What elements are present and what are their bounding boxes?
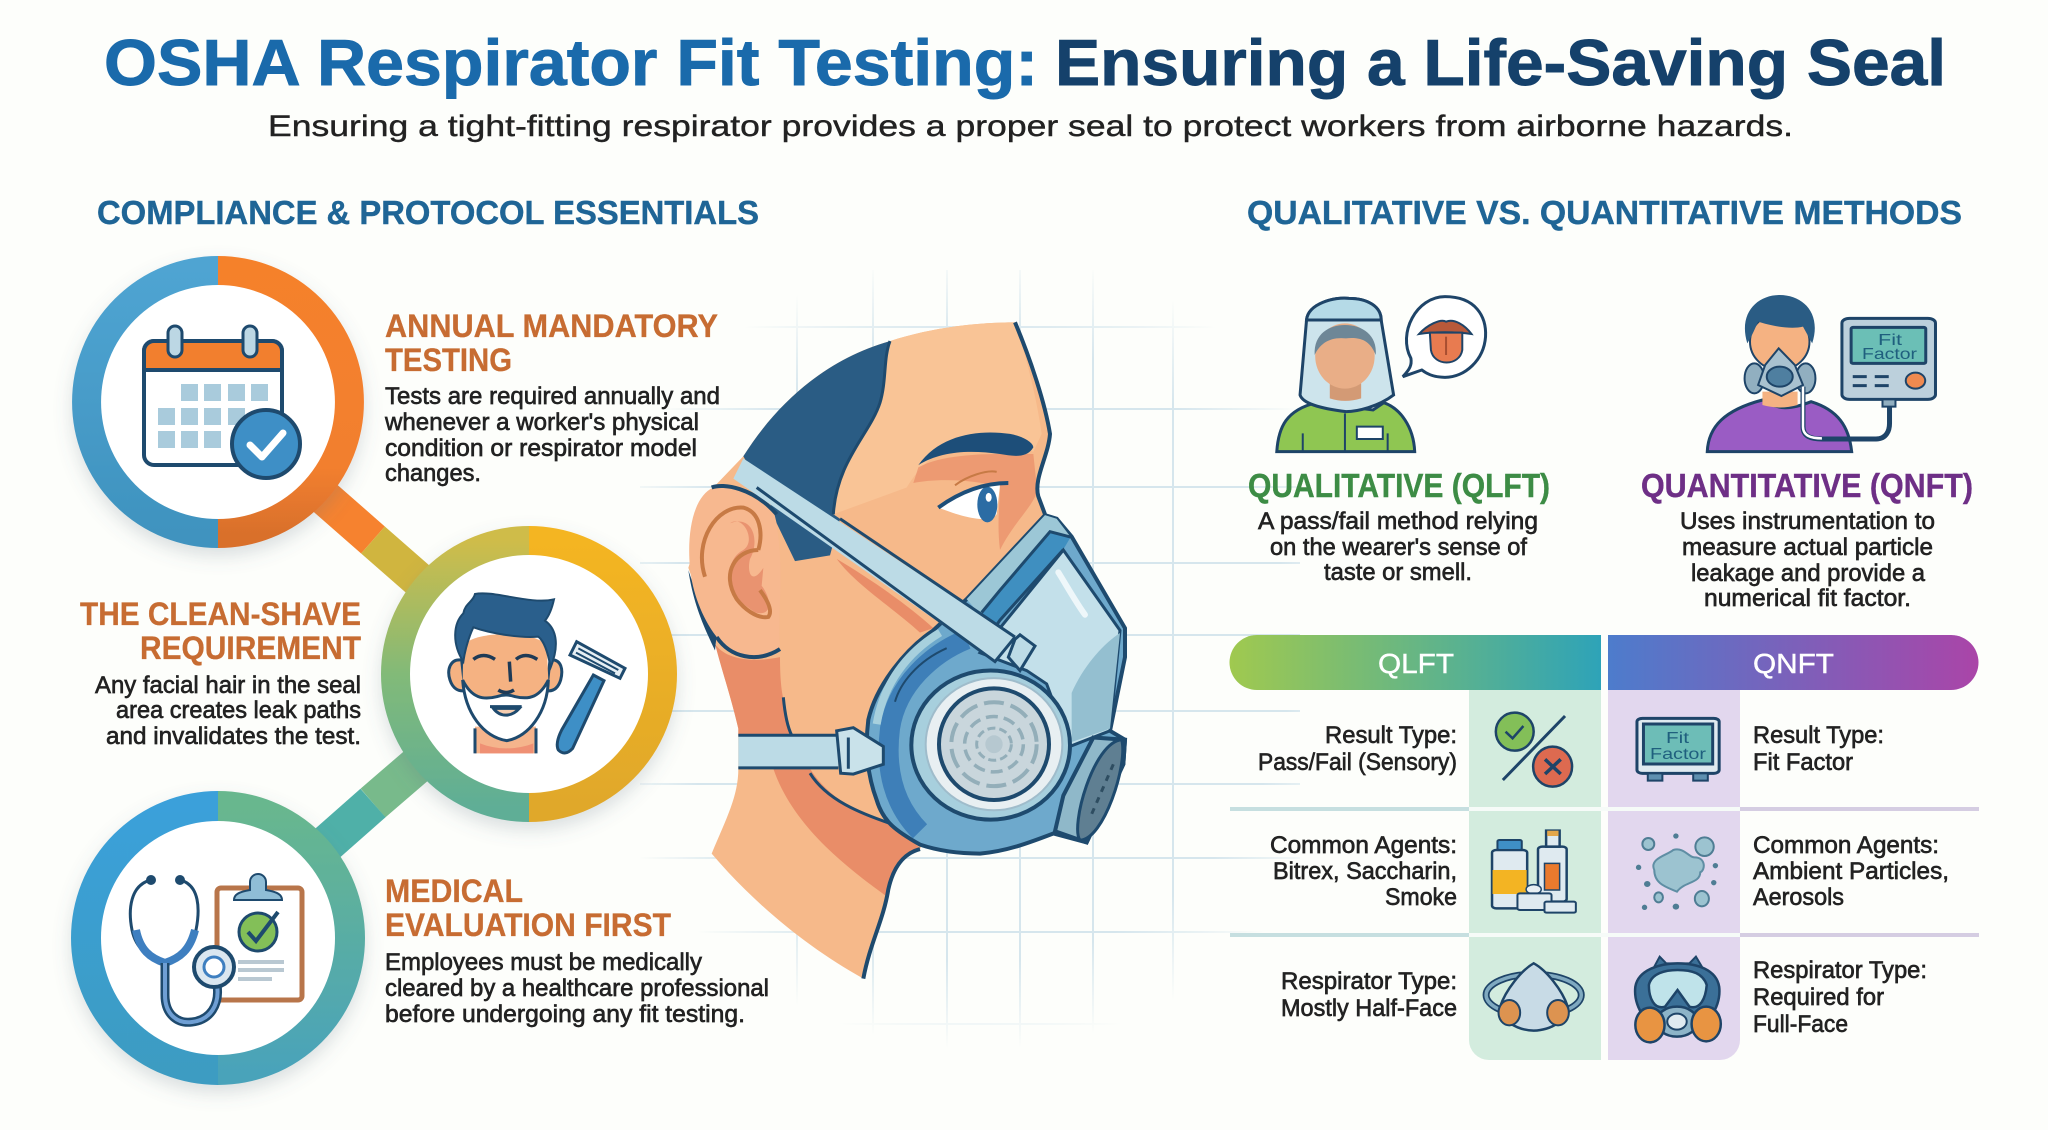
text: the clean-shave requirement bbox=[80, 596, 361, 750]
row 1 QLFT text: result type bbox=[1258, 722, 1457, 776]
ring: medical evaluation bbox=[86, 806, 350, 1070]
header: QNFT bbox=[1608, 635, 1978, 690]
text: quantitative QNFT: Uses instrumentation to bbox=[1680, 508, 1935, 535]
row 2 QLFT text: common agents bbox=[1270, 832, 1457, 911]
column: QNFT purple band bbox=[1608, 690, 1740, 1060]
beard bbox=[463, 680, 548, 741]
row 2 QNFT text: common agents: Ambient Particles, bbox=[1753, 858, 1949, 885]
row 1 QNFT text: result type bbox=[1753, 722, 1884, 776]
jaw lines bbox=[783, 697, 893, 825]
row dividers bbox=[1230, 807, 1979, 937]
row 3 QNFT text: respirator type: Respirator Type: bbox=[1753, 957, 1927, 984]
closed eyes nose and mouth bbox=[473, 655, 537, 692]
face profile outline bbox=[1015, 322, 1050, 514]
text: the clean-shave requirement: and invalidates the test. bbox=[106, 723, 361, 750]
connector: clean shave to medical evaluation bbox=[305, 741, 445, 863]
text: quantitative QNFT: measure actual particle bbox=[1682, 534, 1933, 561]
face bbox=[463, 634, 548, 741]
text: quantitative QNFT: QUANTITATIVE (QNFT) bbox=[1641, 467, 1973, 504]
row 3 QNFT text: respirator type: Required for bbox=[1753, 984, 1884, 1011]
eye bbox=[938, 471, 1008, 522]
icon: pass fail bbox=[1496, 713, 1572, 787]
icon: half-face respirator bbox=[1486, 963, 1581, 1031]
comparison table bbox=[1230, 635, 1979, 1060]
title bbox=[104, 26, 1946, 99]
text: medical evaluation first bbox=[385, 873, 769, 1028]
header: QNFT: QNFT bbox=[1753, 648, 1834, 679]
upper strap bbox=[733, 458, 1035, 671]
icon: person in respirator with fit factor meter: Factor bbox=[1862, 346, 1918, 363]
title: OSHA Respirator Fit Testing: bbox=[104, 26, 1038, 99]
neck outline bbox=[863, 849, 920, 979]
text: medical evaluation first: Employees must be medically bbox=[385, 949, 702, 976]
text: the clean-shave requirement: area creates leak paths bbox=[116, 697, 361, 724]
header: QLFT bbox=[1230, 635, 1601, 690]
icon: particles cloud bbox=[1636, 833, 1718, 910]
connector: annual testing to clean shave bbox=[300, 476, 445, 603]
row 2 QLFT text: common agents: Bitrex, Saccharin, bbox=[1273, 858, 1457, 885]
text: qualitative QLFT: on the wearer's sense of bbox=[1270, 534, 1527, 561]
row 3 QNFT text: respirator type bbox=[1753, 957, 1927, 1038]
text: annual mandatory testing bbox=[384, 308, 720, 487]
neck bbox=[475, 727, 536, 753]
row 2 QNFT text: common agents bbox=[1753, 832, 1949, 911]
text: qualitative QLFT: QUALITATIVE (QLFT) bbox=[1248, 467, 1550, 504]
header: QLFT: QLFT bbox=[1378, 648, 1454, 679]
text: qualitative QLFT bbox=[1248, 467, 1550, 586]
eyebrow bbox=[918, 432, 1033, 465]
text: qualitative QLFT: taste or smell. bbox=[1324, 559, 1472, 586]
text: annual mandatory testing: Tests are required annually and bbox=[385, 383, 720, 410]
hair bbox=[688, 341, 890, 650]
text: qualitative QLFT: A pass/fail method relying bbox=[1258, 508, 1538, 535]
text: medical evaluation first: before undergoing any fit testing. bbox=[385, 1001, 745, 1028]
heading: qualitative vs quantitative methods: QUALITATIVE VS. QUANTITATIVE METHODS bbox=[1247, 194, 1962, 231]
row 1 QLFT text: result type: Result Type: bbox=[1325, 722, 1457, 749]
icon: person in hood with taste bubble bbox=[1277, 297, 1486, 452]
row 3 QLFT text: respirator type: Mostly Half-Face bbox=[1281, 995, 1457, 1022]
ring: annual testing bbox=[87, 270, 349, 534]
ears bbox=[449, 660, 562, 691]
row 3 QLFT text: respirator type bbox=[1281, 968, 1457, 1022]
lower strap bbox=[738, 728, 883, 774]
icon: fit factor screen bbox=[1637, 718, 1719, 781]
skin bbox=[688, 322, 1050, 979]
text: annual mandatory testing: changes. bbox=[385, 460, 481, 487]
row 3 QNFT text: respirator type: Full-Face bbox=[1753, 1011, 1848, 1038]
icon: bottles and tablets bbox=[1492, 831, 1576, 913]
icon: person in respirator with fit factor meter bbox=[1707, 295, 1935, 452]
row 3 QLFT text: respirator type: Respirator Type: bbox=[1281, 968, 1457, 995]
large filter cartridge bbox=[911, 671, 1070, 820]
ring: clean shave bbox=[396, 540, 662, 808]
text: annual mandatory testing: ANNUAL MANDATORY bbox=[385, 308, 718, 344]
mask body and seal bbox=[867, 515, 1125, 854]
text: quantitative QNFT: numerical fit factor. bbox=[1704, 585, 1911, 612]
row 1 QLFT text: result type: Pass/Fail (Sensory) bbox=[1258, 749, 1457, 776]
text: quantitative QNFT: leakage and provide a bbox=[1691, 560, 1926, 587]
icon: fit factor screen: Fit bbox=[1666, 730, 1690, 747]
side cartridge bbox=[1055, 738, 1125, 842]
subtitle: Ensuring a tight-fitting respirator provides a proper seal to protect workers from airborne hazards. bbox=[268, 110, 1793, 143]
heading: compliance and protocol essentials: COMPLIANCE & PROTOCOL ESSENTIALS bbox=[97, 194, 759, 231]
text: quantitative QNFT bbox=[1641, 467, 1973, 612]
text: the clean-shave requirement: REQUIREMENT bbox=[140, 630, 361, 666]
title: Ensuring a Life-Saving Seal bbox=[1055, 26, 1946, 99]
text: the clean-shave requirement: THE CLEAN-SHAVE bbox=[80, 596, 361, 632]
row 1 QNFT text: result type: Fit Factor bbox=[1753, 749, 1853, 776]
text: annual mandatory testing: TESTING bbox=[385, 342, 512, 378]
row 2 QLFT text: common agents: Common Agents: bbox=[1270, 832, 1457, 859]
ear bbox=[689, 486, 781, 659]
icon: stethoscope and clipboard bbox=[130, 874, 302, 1022]
razor bbox=[557, 642, 625, 753]
icon: fit factor screen: Factor bbox=[1650, 746, 1707, 763]
hair bbox=[455, 593, 556, 667]
neck and jaw shadows bbox=[715, 454, 1037, 896]
row 2 QNFT text: common agents: Common Agents: bbox=[1753, 832, 1939, 859]
icon: person in respirator with fit factor meter: Fit bbox=[1878, 332, 1903, 349]
icon: man with beard and razor bbox=[449, 593, 625, 753]
icon: full-face respirator bbox=[1635, 957, 1721, 1042]
icon: calendar with check badge bbox=[144, 326, 300, 478]
row 2 QLFT text: common agents: Smoke bbox=[1385, 884, 1457, 911]
text: medical evaluation first: EVALUATION FIRST bbox=[385, 907, 671, 943]
text: medical evaluation first: cleared by a healthcare professional bbox=[385, 975, 769, 1002]
text: annual mandatory testing: condition or respirator model bbox=[385, 435, 697, 462]
column: QLFT green band bbox=[1469, 690, 1601, 1060]
text: annual mandatory testing: whenever a worker's physical bbox=[384, 409, 699, 436]
row 2 QNFT text: common agents: Aerosols bbox=[1753, 884, 1844, 911]
text: the clean-shave requirement: Any facial hair in the seal bbox=[95, 672, 361, 699]
row 1 QNFT text: result type: Result Type: bbox=[1753, 722, 1884, 749]
text: medical evaluation first: MEDICAL bbox=[385, 873, 523, 909]
illustration: head profile wearing half-face respirator bbox=[688, 322, 1125, 979]
